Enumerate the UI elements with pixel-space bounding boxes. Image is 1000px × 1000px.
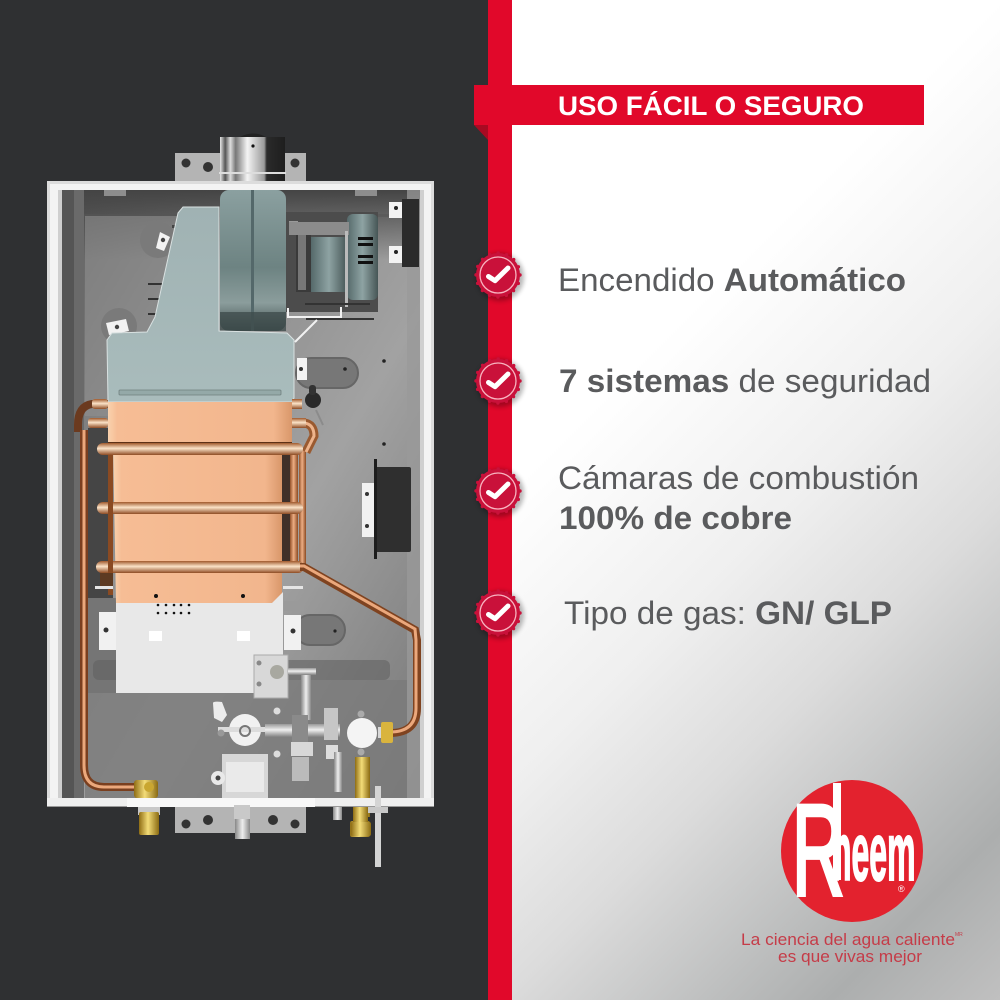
check badge 1 (476, 253, 524, 301)
burner cover (107, 207, 294, 402)
Rheem logo: ® (898, 884, 905, 894)
feature text 3 line 1: Cámaras de combustión (558, 460, 919, 496)
water outlet solenoid (211, 754, 268, 800)
casing bottom edge (47, 798, 434, 807)
burner control box (116, 592, 283, 693)
control box bracket left and right (95, 586, 304, 650)
cover bracket (297, 358, 307, 380)
feature: encendido automático (476, 253, 906, 301)
Rheem logo: R (792, 779, 845, 923)
casing frame (47, 181, 434, 807)
check badge 3 (476, 469, 524, 517)
feature: cámaras de combustión (476, 460, 919, 536)
rear panel (62, 190, 420, 798)
feature: sistemas de seguridad (476, 359, 931, 407)
bottom mounting plate (175, 807, 306, 833)
red vertical strip (488, 0, 512, 1000)
header banner: USO FÁCIL O SEGURO (558, 90, 864, 121)
tagline: La ciencia del agua caliente (741, 930, 955, 949)
water-flow sensor behind cover (305, 385, 323, 425)
feature text 2: 7 sistemas de seguridad (559, 363, 931, 399)
Rheem logo: heem (832, 808, 916, 898)
check badge 2 (476, 359, 524, 407)
product illustration: water heater (47, 134, 434, 867)
tagline: es que vivas mejor (778, 947, 922, 966)
brass gas inlet (350, 757, 370, 837)
blower housing (220, 190, 286, 331)
feature: tipo de gas (476, 591, 892, 639)
flue chimney (219, 134, 286, 181)
tagline (741, 930, 963, 966)
feature text 3 line 2: 100% de cobre (559, 500, 792, 536)
bottom connectors (138, 786, 388, 867)
blower motor (286, 212, 378, 342)
copper tube coils (78, 399, 306, 595)
feature text 4: Tipo de gas: GN/ GLP (564, 595, 892, 631)
right vertical copper tubes (282, 423, 314, 568)
gas valve assembly (213, 702, 342, 792)
top mounting plate (175, 153, 306, 181)
right light background (512, 0, 1000, 1000)
Rheem logo (781, 779, 923, 923)
right white valve with brass nut (347, 710, 393, 756)
rounded embossed mounts (101, 222, 176, 344)
check badge 4 (476, 591, 524, 639)
top right terminals (389, 199, 419, 267)
control module (362, 459, 411, 559)
heat exchanger copper body (108, 402, 292, 603)
tagline: MR (955, 932, 963, 938)
feature text 1: Encendido Automático (558, 262, 906, 298)
diagonal copper pipe (300, 566, 417, 733)
header banner (474, 85, 924, 140)
left vertical copper pipe (84, 430, 140, 787)
left dark background (0, 0, 488, 1000)
left brass elbow (134, 780, 158, 798)
gas solenoid block (254, 655, 316, 720)
